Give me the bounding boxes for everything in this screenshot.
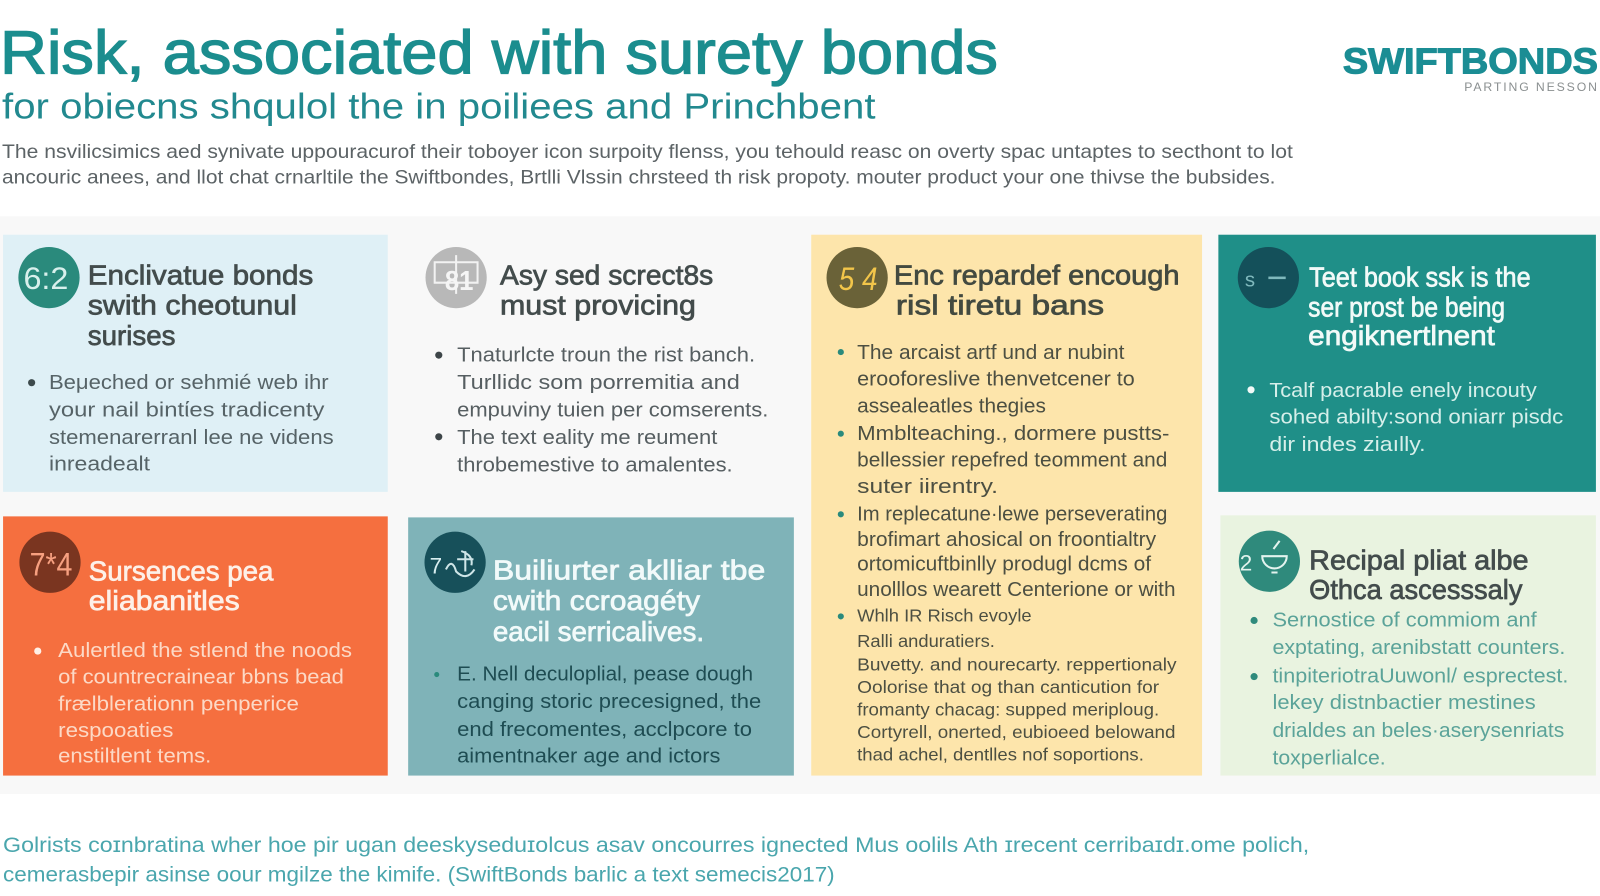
- body 1: your nail bintίes tradicenty: [49, 399, 325, 421]
- footer text: cemerasbepir asinse oour mgilze the kimife. (SwiftBonds barlic a text semecis2017): [3, 863, 835, 887]
- heading 1: [88, 260, 313, 351]
- heading 7: [1309, 544, 1529, 605]
- body 6: [434, 664, 761, 767]
- body 3: Im replecatune·lewe perseverating: [857, 503, 1167, 525]
- body 2: throbemestive to amalentes.: [457, 454, 733, 476]
- title: Risk, associated with surety bonds: [0, 18, 998, 86]
- body 6: canging storic precesigned, the: [457, 691, 761, 713]
- body 3: ortomicuftbinlly produgl dcms of: [857, 553, 1151, 575]
- body 3: bellessier repefred teomment and: [857, 449, 1167, 471]
- body 4: Tcalf pacrable enely incouty: [1269, 380, 1538, 402]
- badge 5: 7*4: [30, 546, 72, 583]
- body 2: [435, 344, 768, 476]
- heading 7: Θthca ascesssaly: [1309, 574, 1523, 605]
- badge 2 icon: 81: [445, 265, 473, 296]
- body 3: thad achel, dentlles nof soportions.: [857, 744, 1144, 764]
- logo: PARTING NESSON: [1464, 80, 1597, 94]
- body 5: frælblerationn penperice: [58, 693, 299, 715]
- body 7: exptating, arenibstatt counters.: [1272, 637, 1565, 659]
- footer text: [3, 833, 1309, 887]
- body 3: suter iirentry.: [857, 476, 998, 498]
- badge 1: [18, 247, 80, 308]
- body 3: erooforeslive thenvetcener to: [857, 369, 1135, 391]
- heading 2: [500, 260, 713, 320]
- body 3: Mmblteaching., dormere pustts-: [857, 423, 1169, 445]
- badge 3: [827, 247, 888, 308]
- body 7: lekey distnbactier mestines: [1272, 692, 1536, 714]
- body 3: fromanty chacag: supped meriploug.: [857, 699, 1159, 719]
- body 4: sohed abilty:sond oniarr pisdc: [1269, 407, 1563, 429]
- body 3: assealeatles thegies: [857, 395, 1046, 417]
- heading 1: surises: [88, 320, 176, 351]
- body 3: Oolorise that og than canticution for: [857, 677, 1159, 697]
- body 3: unolllos wearett Centerione or with: [857, 579, 1176, 601]
- heading 1: Enclivatue bonds: [88, 260, 313, 291]
- heading 1: swith cheotunul: [88, 289, 297, 320]
- heading 4: [1308, 262, 1531, 351]
- badge 1: 6:2: [23, 260, 68, 296]
- heading 6: [493, 555, 765, 647]
- heading 3: [894, 260, 1180, 320]
- subtitle: for obiecns shqulol the in poiliees and Princhbent: [2, 86, 876, 126]
- body 3: Buvetty. and nourecarty. reppertionaly: [857, 654, 1177, 674]
- panel: card 1 light blue: [3, 235, 388, 492]
- heading 7: Recipal pliat albe: [1309, 544, 1529, 575]
- body 2: empuviny tuien per comserents.: [457, 399, 768, 421]
- panel: card 2 plain: [408, 235, 794, 492]
- intro text: ancouric anees, and llot chat crnarltile the Swiftbondes, Brtlli Vlssin chrsteed th risk propoty. mouter product your one thivse the bubsides.: [2, 167, 1276, 189]
- body 3: Ralli anduratiers.: [857, 631, 995, 651]
- heading 3: risl tiretu bans: [896, 289, 1104, 320]
- body 4: dir indes ziaılly.: [1269, 434, 1426, 456]
- panel: card 5 orange: [3, 516, 388, 776]
- heading 2: Asy sed screct8s: [500, 260, 713, 291]
- body 5: Aulertled the stlend the noods: [58, 640, 352, 662]
- logo: SWIFTBONDS: [1343, 41, 1598, 81]
- body 7: [1251, 610, 1568, 769]
- heading 4: ser prost be being: [1308, 291, 1505, 322]
- body 3: Whlh IR Risch evoyle: [857, 605, 1032, 625]
- panel: card 7 light green: [1220, 515, 1596, 776]
- panel: card 4 teal: [1218, 235, 1596, 492]
- body 2: Tnaturlcte troun the rist banch.: [457, 344, 755, 366]
- heading 4: engiknertlnent: [1308, 320, 1495, 351]
- panel: card 3 yellow: [811, 235, 1202, 776]
- heading 3: Enc repardef encough: [894, 260, 1180, 291]
- heading 5: eliabanitles: [89, 585, 240, 616]
- body 7: tinpiteriotraUuwonl/ esprectest.: [1272, 666, 1568, 688]
- badge 6 icon: 7: [430, 554, 442, 579]
- body 3: Cortyrell, onerted, eubioeed belowand: [857, 722, 1176, 742]
- badge 2 icon: [426, 247, 487, 308]
- heading 6: cwith ccroagéty: [493, 585, 700, 616]
- intro text: [2, 141, 1294, 189]
- footer text: Golrists coɪnbratina wher hoe pir ugan deeskyseduɪolcus asav oncourres ignected Mus oolils Ath ɪrecent cerribaɪdɪ.ome polich,: [3, 833, 1309, 857]
- body 1: inreadealt: [49, 453, 150, 475]
- badge 4: [1238, 247, 1299, 308]
- heading 2: must provicing: [500, 289, 696, 320]
- badge 3: 5 4: [839, 260, 878, 297]
- body 7: Sernostice of commiom anf: [1272, 610, 1537, 632]
- body 3: brofimart ahosical on froontialtry: [857, 529, 1157, 551]
- heading 6: Builiurter aklliar tbe: [493, 555, 765, 586]
- body 4: [1247, 380, 1563, 456]
- badge 7 icon: 2: [1240, 550, 1252, 575]
- body 7: toxperlialce.: [1272, 747, 1386, 769]
- intro text: The nsvilicsimics aed synivate uppouracurof their toboyer icon surpoity flenss, you tehould reasc on overty spac untaptes to secthont to lot: [2, 141, 1294, 163]
- body 5: respooaties: [58, 720, 173, 742]
- badge 6 icon: [424, 532, 486, 593]
- badge 7 icon: [1239, 531, 1300, 592]
- body 6: E. Nell deculoplial, pease dough: [457, 664, 753, 686]
- body 5: enstiltlent tems.: [58, 745, 211, 767]
- body 5: [34, 640, 352, 767]
- body 1: Beμeched or sehmié web ihr: [49, 372, 329, 394]
- body 3: The arcaist artf und ar nubint: [857, 342, 1125, 364]
- body 2: Turllidc som porremitia and: [457, 372, 740, 394]
- panel: card 6 muted teal: [408, 517, 794, 776]
- heading 5: [89, 556, 274, 616]
- body 2: The text eality me reument: [457, 427, 718, 449]
- body 1: [28, 372, 334, 475]
- heading 5: Sursences pea: [89, 556, 274, 587]
- badge 5: [19, 532, 81, 593]
- body 6: aimentnaker age and ictors: [457, 745, 720, 767]
- badge 4: s: [1245, 270, 1255, 292]
- body 1: stemenarerranl lee ne videns: [49, 427, 334, 449]
- body 5: of countrecrainear bbns bead: [58, 667, 344, 689]
- body 6: end frecomentes, acclpcore to: [457, 719, 752, 741]
- body 3: [838, 342, 1177, 764]
- body 7: drialdes an beles·aserysenriats: [1272, 720, 1564, 742]
- heading 6: eacil serricalives.: [493, 616, 704, 647]
- heading 4: Teet book ssk is the: [1309, 262, 1531, 293]
